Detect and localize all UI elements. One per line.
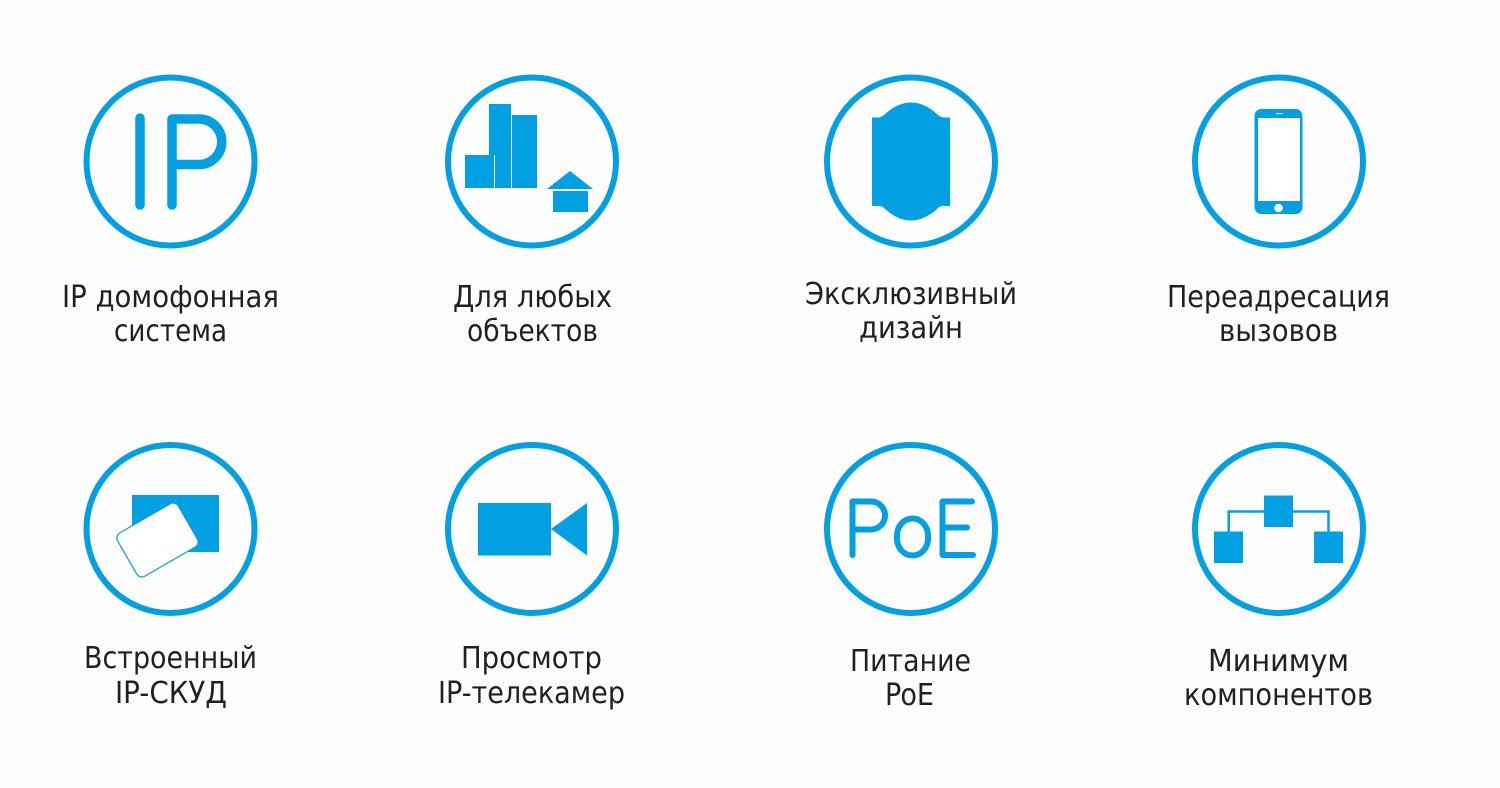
icon: IP letters in circle: [86, 78, 254, 246]
panel: IP intercom system: [62, 78, 279, 349]
label: IP intercom system: система: [114, 314, 227, 349]
label: built-in access control: [84, 641, 257, 711]
icon: door panel shape: [827, 78, 995, 246]
icon: smartphone: [1195, 78, 1363, 246]
label: built-in access control: IP-СКУД: [115, 676, 227, 711]
label: for any buildings: объектов: [467, 314, 598, 349]
icon: access card and reader: [86, 445, 254, 613]
icon: network tree: [1195, 445, 1363, 613]
label: IP camera viewing: IP-телекамер: [438, 676, 625, 711]
panel: IP camera viewing: [438, 445, 625, 711]
label: minimum components: компонентов: [1184, 678, 1373, 713]
icon: buildings and house: [448, 78, 616, 246]
label: PoE power: PoE: [885, 678, 934, 713]
panel: call forwarding: [1167, 78, 1390, 349]
icon: PoE letters in circle: [827, 445, 995, 613]
label: exclusive design: [805, 277, 1017, 346]
panel: for any buildings: [448, 78, 616, 349]
panel: built-in access control: [84, 445, 257, 711]
panel: exclusive design: [805, 78, 1017, 346]
label: IP camera viewing: [438, 641, 625, 711]
label: IP intercom system: IP домофонная: [62, 280, 279, 315]
label: for any buildings: [453, 280, 612, 349]
label: exclusive design: дизайн: [859, 311, 963, 346]
label: for any buildings: Для любых: [453, 280, 612, 315]
label: call forwarding: Переадресация: [1167, 280, 1390, 315]
label: PoE power: [850, 644, 971, 713]
icon: video camera: [448, 445, 616, 613]
label: IP intercom system: [62, 280, 279, 349]
label: built-in access control: Встроенный: [84, 641, 257, 676]
panel: minimum components: [1184, 445, 1373, 713]
label: exclusive design: Эксклюзивный: [805, 277, 1017, 312]
label: PoE power: Питание: [850, 644, 971, 679]
label: call forwarding: [1167, 280, 1390, 349]
label: minimum components: [1184, 644, 1373, 713]
panel: PoE power: [827, 445, 995, 713]
label: call forwarding: вызовов: [1219, 314, 1338, 349]
label: minimum components: Минимум: [1208, 644, 1349, 679]
label: IP camera viewing: Просмотр: [461, 641, 602, 676]
